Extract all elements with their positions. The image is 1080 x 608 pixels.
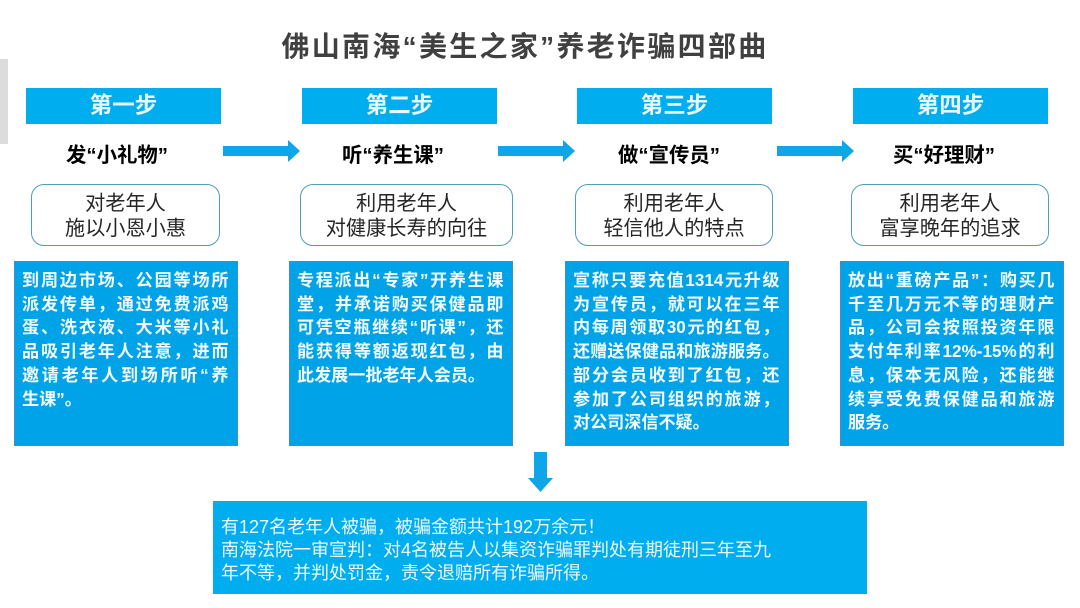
step 1 rounded box: 对老年人	[85, 193, 166, 215]
step 4 rounded box: 富享晚年的追求	[879, 218, 1021, 240]
arrow: step 2 to 3	[498, 140, 575, 162]
step 3 detail panel: 参加了公司组织的旅游，	[573, 390, 780, 409]
step 1 rounded box: 施以小恩小惠	[65, 218, 186, 240]
step 3 detail panel: 部分会员收到了红包，还	[573, 366, 780, 385]
step 1 subtitle: 发“小礼物”	[66, 145, 168, 167]
step 3 subtitle: 做“宣传员”	[618, 145, 720, 167]
step 3 header	[577, 88, 772, 124]
step 3 rounded box: 利用老年人	[624, 193, 724, 215]
step 3 rounded box: 轻信他人的特点	[603, 218, 745, 240]
arrow: step 1 to 2	[223, 140, 300, 162]
step 1 detail panel: 到周边市场、公园等场所	[22, 271, 228, 290]
step 4 rounded box: 利用老年人	[900, 193, 1000, 215]
step 1 header: 第一步	[90, 93, 157, 118]
result panel	[213, 501, 867, 594]
step 2 detail panel: 专程派出“专家”开养生课	[297, 271, 504, 290]
step 3 detail panel: 宣称只要充值1314元升级	[573, 271, 780, 290]
step 4 detail panel: 放出“重磅产品”：购买几	[848, 271, 1054, 290]
step 4 detail panel: 品，公司会按照投资年限	[848, 318, 1054, 337]
step 1 detail panel: 生课”。	[22, 390, 82, 409]
step 1 rounded box	[31, 184, 220, 246]
result panel: 有127名老年人被骗，被骗金额共计192万余元！	[221, 517, 605, 537]
step 1 detail panel: 蛋、洗衣液、大米等小礼	[22, 318, 228, 337]
step 2 detail panel: 此发展一批老年人会员。	[297, 366, 485, 385]
step 2 detail panel: 堂，并承诺购买保健品即	[297, 295, 504, 314]
step 4 detail panel: 服务。	[848, 413, 899, 432]
step 3 detail panel: 对公司深信不疑。	[573, 413, 710, 432]
step 1 detail panel: 邀请老年人到场所听“养	[22, 366, 228, 385]
result panel: 年不等，并判处罚金，责令退赔所有诈骗所得。	[221, 563, 599, 583]
step 4 header	[853, 88, 1048, 124]
step 3 detail panel: 为宣传员，就可以在三年	[573, 295, 780, 314]
step 1 detail panel: 品吸引老年人注意，进而	[22, 342, 228, 361]
decorative side tab	[0, 59, 8, 144]
result panel: 南海法院一审宣判：对4名被告人以集资诈骗罪判处有期徒刑三年至九	[221, 540, 771, 560]
step 1 detail panel	[14, 261, 238, 446]
arrow: step 3 to 4	[777, 140, 854, 162]
step 3 rounded box	[575, 184, 773, 246]
step 3 detail panel: 还赠送保健品和旅游服务。	[573, 342, 780, 361]
step 4 detail panel	[840, 261, 1064, 446]
step 4 detail panel: 支付年利率12%-15%的利	[848, 342, 1054, 361]
step 2 detail panel: 可凭空瓶继续“听课”，还	[297, 318, 504, 337]
step 4 header: 第四步	[917, 93, 984, 118]
step 3 detail panel	[565, 261, 789, 446]
step 2 header	[302, 88, 497, 124]
step 2 header: 第二步	[366, 93, 433, 118]
step 1 header	[26, 88, 221, 124]
step 4 detail panel: 千至几万元不等的理财产	[848, 295, 1054, 314]
step 2 subtitle: 听“养生课”	[342, 145, 444, 167]
step 2 rounded box	[300, 184, 513, 246]
step 3 header: 第三步	[641, 93, 708, 118]
step 2 detail panel	[289, 261, 513, 446]
step 4 detail panel: 续享受免费保健品和旅游	[848, 390, 1054, 409]
step 4 detail panel: 息，保本无风险，还能继	[848, 366, 1054, 385]
title: 佛山南海“美生之家”养老诈骗四部曲	[281, 31, 769, 62]
step 2 detail panel: 能获得等额返现红包，由	[297, 342, 504, 361]
step 4 subtitle: 买“好理财”	[893, 145, 995, 167]
step 2 rounded box: 利用老年人	[356, 193, 457, 215]
step 2 rounded box: 对健康长寿的向往	[326, 218, 487, 240]
step 4 rounded box	[851, 184, 1049, 246]
arrow: down to result	[528, 452, 553, 492]
step 1 detail panel: 派发传单，通过免费派鸡	[22, 295, 228, 314]
step 3 detail panel: 内每周领取30元的红包，	[573, 318, 780, 337]
